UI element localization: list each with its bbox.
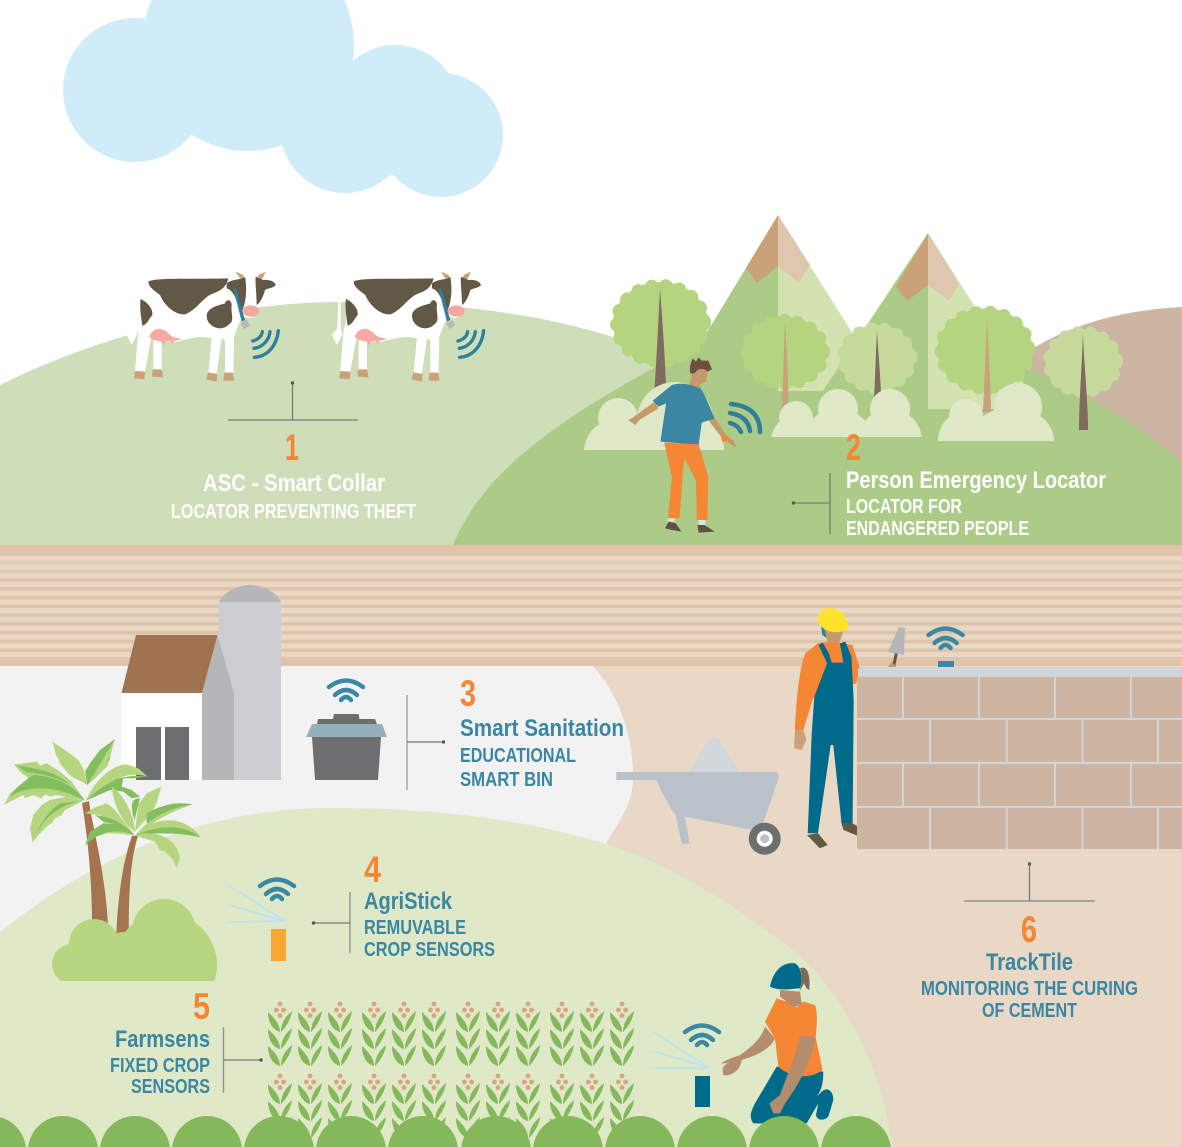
- callout 5: Farmsens: 5: [193, 986, 210, 1027]
- callout 4: AgriStick: [312, 849, 495, 961]
- callout 5: Farmsens: [110, 986, 263, 1098]
- callout 5: Farmsens: FIXED CROP: [110, 1055, 210, 1077]
- cows: [127, 272, 484, 382]
- light green hill: [0, 302, 700, 545]
- callout 1: ASC Smart Collar: LOCATOR PREVENTING THEFT: [171, 501, 416, 523]
- person with locator: [628, 357, 737, 533]
- trees: [613, 282, 1120, 430]
- trowel: [888, 627, 905, 667]
- icon: AgriStick sensor: [228, 880, 294, 961]
- light green field hill: [0, 808, 892, 1147]
- callout 1: ASC Smart Collar: 1: [285, 427, 299, 468]
- callout 1: ASC Smart Collar: [171, 381, 416, 523]
- callout 5: Farmsens: Farmsens: [115, 1026, 210, 1053]
- callout 6: TrackTile: MONITORING THE CURING: [921, 978, 1138, 1000]
- icon: person signal: [730, 404, 760, 432]
- callout 2: Person Emergency Locator: ENDANGERED PEOPLE: [846, 518, 1029, 540]
- callout 6: TrackTile: OF CEMENT: [982, 1000, 1077, 1022]
- callout 1: ASC Smart Collar: ASC - Smart Collar: [203, 470, 385, 497]
- bushes: [584, 382, 1054, 450]
- callout 2: Person Emergency Locator: LOCATOR FOR: [846, 496, 962, 518]
- dark green hill: [453, 340, 1182, 545]
- palm trees: [4, 739, 201, 945]
- callout 4: AgriStick: CROP SENSORS: [364, 939, 495, 961]
- icon: smart bin with wifi: [306, 680, 387, 780]
- wheelbarrow: [616, 737, 781, 855]
- callout 3: Smart Sanitation: 3: [460, 673, 476, 714]
- icon: farmer sensor: [652, 1026, 719, 1107]
- cloud: [63, 0, 503, 197]
- callout 6: TrackTile: TrackTile: [986, 949, 1073, 976]
- callout 4: AgriStick: AgriStick: [364, 888, 453, 915]
- callout 4: AgriStick: REMUVABLE: [364, 917, 466, 939]
- callout 6: TrackTile: [921, 862, 1138, 1022]
- callout 2: Person Emergency Locator: 2: [846, 427, 861, 468]
- callout 2: Person Emergency Locator: [792, 427, 1106, 540]
- tan ground: [0, 666, 1182, 1147]
- icon: wall sensor with wifi: [929, 628, 963, 667]
- mountains: [660, 215, 1040, 410]
- bush by palms: [52, 899, 217, 981]
- callout 5: Farmsens: SENSORS: [131, 1076, 210, 1098]
- bottom green domes: [0, 1116, 891, 1147]
- construction worker: [794, 608, 860, 848]
- farm building and silo: [121, 585, 281, 780]
- callout 3: Smart Sanitation: [407, 673, 624, 791]
- farmer: [721, 963, 833, 1123]
- callout 3: Smart Sanitation: Smart Sanitation: [460, 715, 624, 742]
- corn crops: [268, 1002, 634, 1138]
- callout 6: TrackTile: 6: [1021, 909, 1037, 950]
- brick wall: [857, 667, 1182, 849]
- callout 3: Smart Sanitation: EDUCATIONAL: [460, 745, 576, 767]
- striped field: [0, 545, 1182, 666]
- callout 4: AgriStick: 4: [364, 849, 381, 890]
- callout 2: Person Emergency Locator: Person Emergency Locator: [846, 467, 1106, 494]
- callout 3: Smart Sanitation: SMART BIN: [460, 769, 553, 791]
- light grey yard: [0, 666, 633, 1000]
- tan hill: [1030, 307, 1182, 545]
